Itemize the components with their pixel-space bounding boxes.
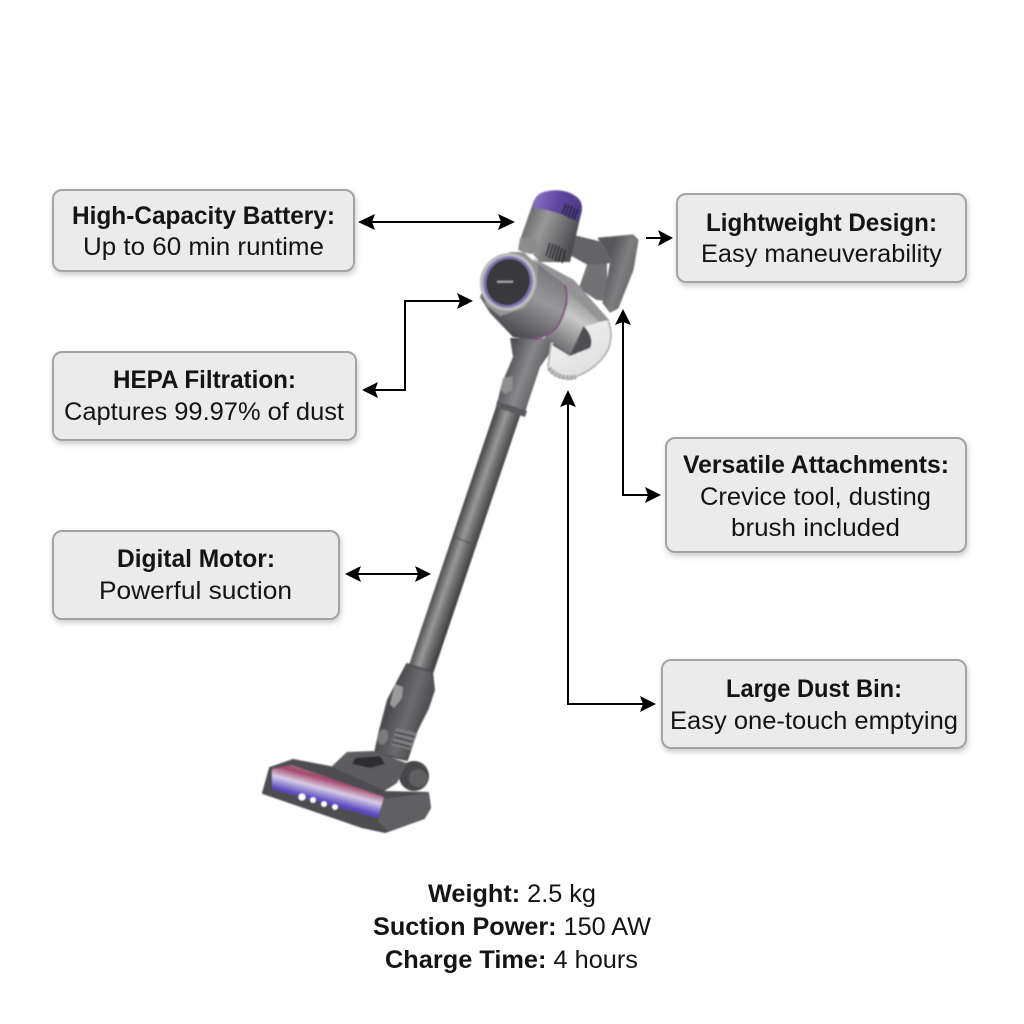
clear dust bin — [548, 300, 611, 379]
badge — [497, 281, 513, 282]
panel: high-capacity battery — [53, 190, 354, 271]
suction power: Suction Power: 150 AW — [373, 913, 651, 941]
description: Captures 99.97% of dust — [64, 398, 344, 426]
neck collar — [496, 401, 527, 417]
disc — [479, 252, 537, 312]
arrow: large dust bin — [560, 390, 656, 712]
panel: digital motor — [53, 531, 339, 619]
battery plate — [598, 235, 638, 312]
vents — [546, 204, 578, 263]
top cylinder — [520, 200, 582, 262]
charge time: Charge Time: 4 hours — [385, 946, 638, 974]
end cap — [378, 793, 430, 831]
pivot button — [376, 728, 390, 746]
purple cap — [533, 190, 582, 222]
LED lights — [298, 794, 338, 810]
roller — [272, 765, 384, 818]
arrow: HEPA filtration — [362, 293, 473, 398]
handle neck — [497, 338, 558, 413]
neck button — [501, 376, 513, 394]
description: Powerful suction — [99, 577, 292, 605]
heading: High-Capacity Battery: — [72, 202, 335, 230]
heading: Digital Motor: — [117, 545, 275, 573]
weight: Weight: 2.5 kg — [428, 880, 596, 908]
arrow: versatile attachments — [615, 309, 661, 503]
hose ribs — [392, 732, 415, 747]
upper handle arm — [570, 236, 614, 264]
housing ring — [470, 244, 546, 320]
arrow: battery — [358, 214, 515, 230]
specifications — [373, 880, 651, 974]
heading: Lightweight Design: — [706, 209, 937, 237]
description: Crevice tool, dusting — [700, 483, 931, 511]
panel: lightweight design — [677, 194, 966, 282]
motor housing — [481, 252, 538, 316]
bin inner — [552, 325, 591, 356]
clasp — [518, 238, 542, 254]
panel: large dust bin — [662, 660, 966, 748]
lower joint — [375, 664, 434, 760]
arrow: digital motor — [345, 566, 431, 582]
heading: Versatile Attachments: — [683, 451, 949, 479]
heading: HEPA Filtration: — [113, 366, 296, 394]
description line 2: brush included — [731, 514, 900, 542]
wand joint line — [453, 537, 476, 545]
main body cylinder — [480, 260, 568, 340]
silver section — [545, 284, 600, 355]
body purple ring — [532, 285, 567, 339]
description: Easy one-touch emptying — [670, 707, 958, 735]
flex hose — [391, 728, 417, 750]
arrow: lightweight design — [646, 230, 673, 246]
dust ring — [549, 368, 576, 378]
purple ring — [475, 248, 541, 316]
lower handle grip — [580, 258, 606, 300]
nozzle neck — [330, 751, 407, 792]
nozzle housing — [263, 760, 430, 832]
panel: HEPA filtration — [53, 352, 356, 440]
description: Up to 60 min runtime — [83, 233, 324, 261]
floor nozzle — [263, 751, 430, 832]
heading: Large Dust Bin: — [726, 675, 902, 703]
vacuum cleaner illustration — [263, 190, 638, 832]
description: Easy maneuverability — [701, 240, 942, 268]
wheel hub — [409, 769, 427, 787]
wheel — [399, 761, 429, 791]
body top strip — [533, 258, 609, 322]
wand release button — [390, 684, 403, 708]
wand tube — [409, 404, 522, 674]
panel: versatile attachments — [666, 438, 966, 552]
neck socket — [352, 756, 385, 768]
